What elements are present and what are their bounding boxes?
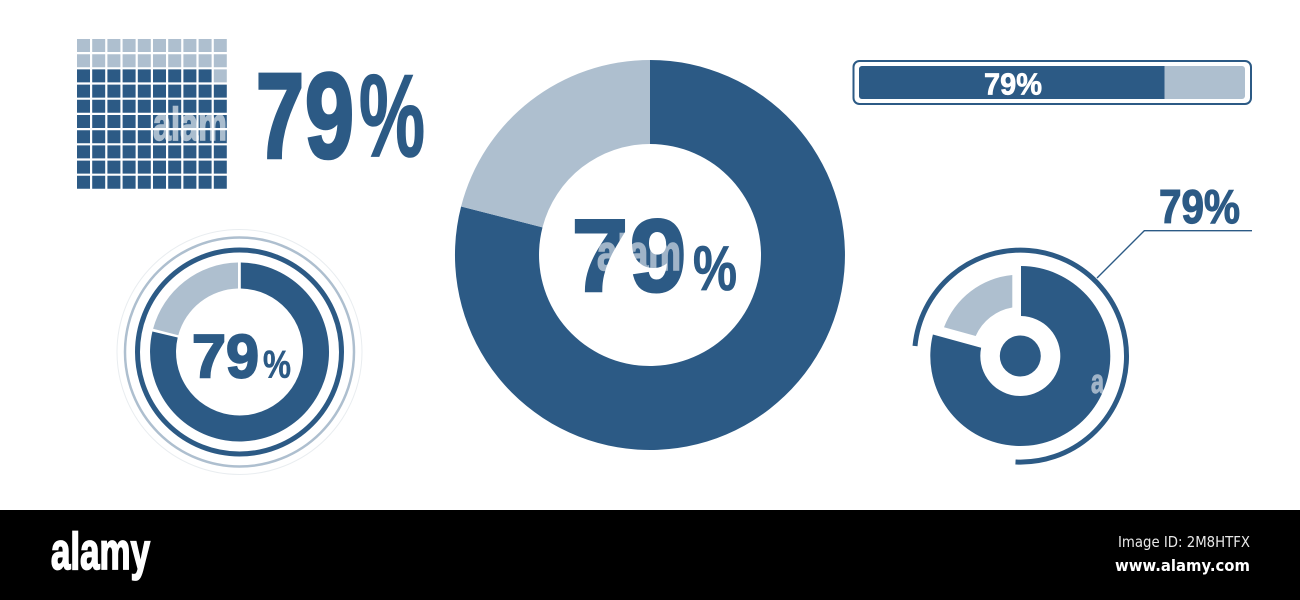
footer band [0, 510, 1300, 600]
panel: exploded donut with callout [915, 180, 1252, 462]
ringed donut filled segment [150, 262, 329, 441]
website: www.alamy.com [1115, 556, 1250, 575]
waffle percent sign: % [359, 50, 425, 181]
bar fill 79% [859, 66, 1164, 99]
offset remaining segment 21% [944, 275, 1012, 336]
callout number and percent label: 79% [1159, 180, 1240, 233]
ringed donut percent sign: % [263, 344, 291, 386]
bar outline [854, 61, 1251, 104]
panel: large central donut chart [455, 60, 845, 450]
donut number label: 9 [630, 199, 686, 313]
watermark fragment on donut label: alam [597, 225, 681, 281]
donut filled segment 79% [455, 60, 845, 450]
ringed donut number: 9 [226, 322, 259, 390]
filled segment 79% [930, 266, 1110, 446]
donut remaining segment 21% [461, 60, 650, 227]
centre dot [1000, 336, 1041, 376]
donut number label: 7 [572, 199, 628, 313]
bar label: 79% [984, 66, 1042, 102]
ringed donut remaining segment [153, 262, 238, 335]
waffle percentage number: 9 [305, 48, 354, 184]
watermark fragment on waffle: alam [153, 98, 227, 150]
callout leader line [1097, 231, 1252, 278]
bar track remainder [859, 66, 1245, 99]
panel: waffle chart with percentage [77, 46, 425, 184]
navy ring [138, 250, 342, 454]
open outer arc [915, 250, 1127, 462]
image id: Image ID: 2M8HTFX [1118, 533, 1250, 551]
ringed donut number: 7 [192, 322, 226, 390]
faint outer ring [117, 230, 362, 474]
donut percent sign: % [693, 234, 737, 304]
footer logo: alamy [51, 523, 150, 581]
waffle percentage number: 7 [256, 48, 304, 184]
watermark fragment on segment: a [1091, 363, 1105, 401]
panel: progress bar [854, 61, 1251, 104]
panel: ringed donut chart [117, 230, 362, 474]
waffle grid: 100 squares, 79 filled [77, 46, 227, 182]
light ring [125, 238, 354, 466]
